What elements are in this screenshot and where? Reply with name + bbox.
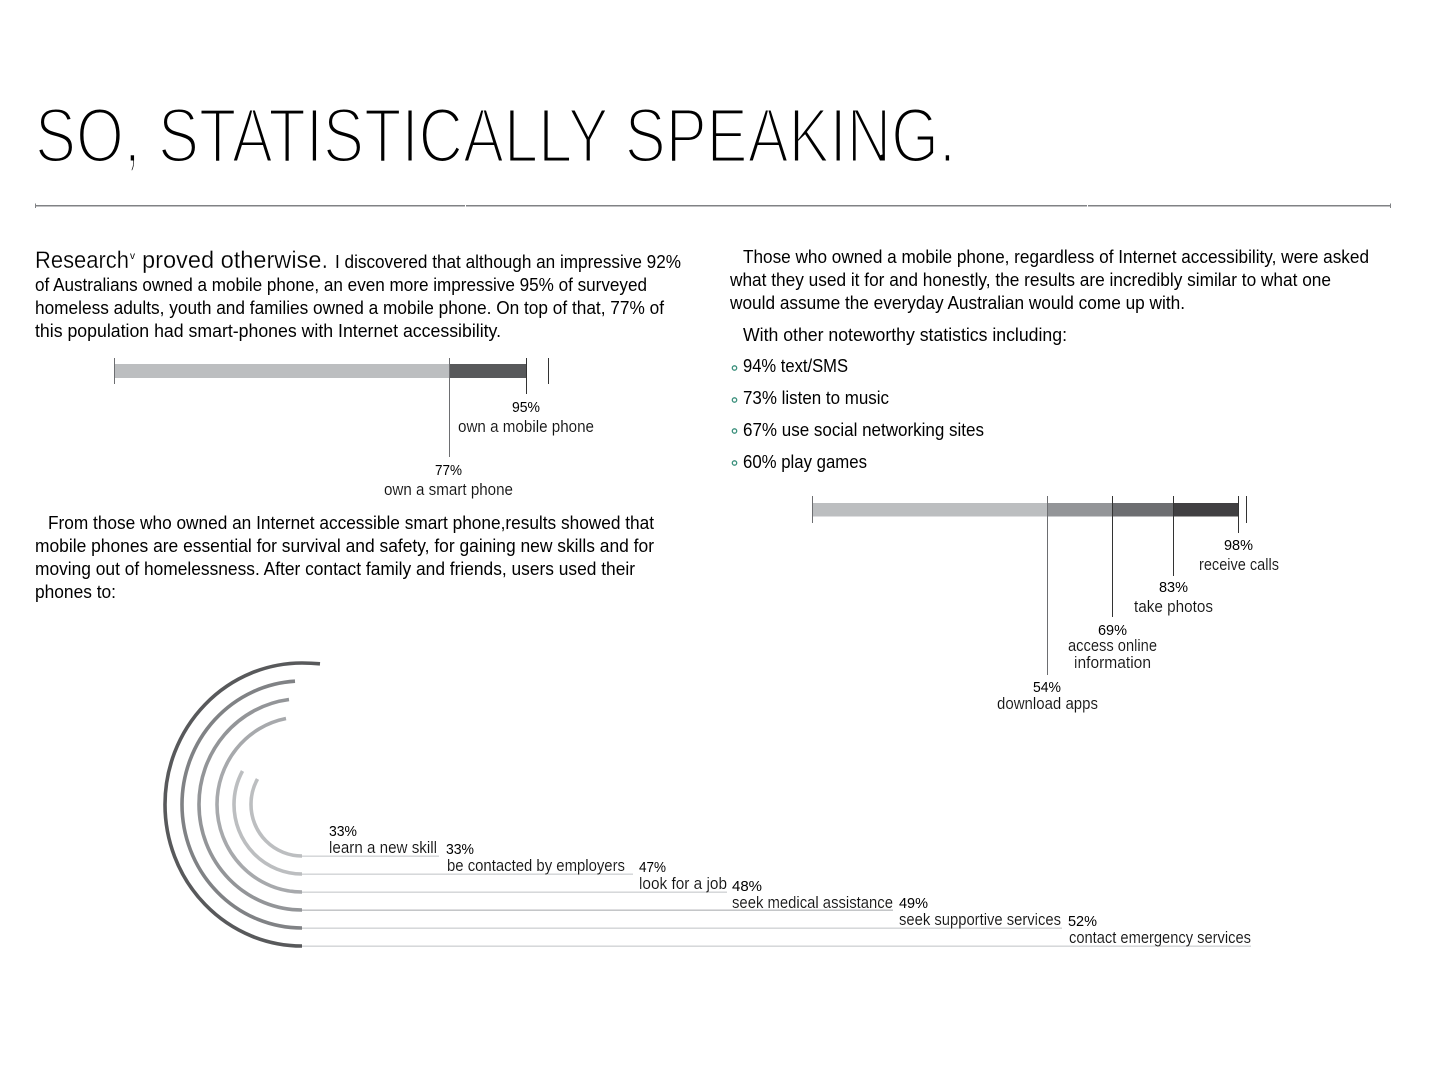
text block: what phones were used for: Those who owned a mobile phone, regardless of Internet accessibility, were asked (743, 247, 1369, 267)
label: 47% look for a job: look for a job (639, 875, 727, 893)
label: 54% download apps (997, 679, 1098, 713)
text block: what phones were used for (729, 247, 1369, 345)
text block: research intro: I discovered that although an impressive 92% (335, 252, 681, 272)
label: 95% own a mobile phone: own a mobile phone (458, 418, 594, 436)
ring: seek supportive services (182, 681, 1062, 928)
label: 54% download apps: download apps (997, 695, 1098, 713)
label: 33% be contacted by employers: 33% (446, 841, 474, 858)
label: 69% access online information: access online (1068, 637, 1157, 655)
label: 47% look for a job: 47% (639, 859, 666, 876)
label: 48% seek medical assistance: seek medical assistance (732, 894, 893, 912)
bullet: play games: 60% play games (743, 452, 867, 472)
text block: what phones were used for: With other noteworthy statistics including: (743, 325, 1067, 345)
label: 52% contact emergency services: contact emergency services (1069, 929, 1251, 947)
bullet list: noteworthy statistics (732, 356, 984, 472)
label: 33% be contacted by employers: be contacted by employers (447, 857, 625, 875)
text block: research intro: proved otherwise. (142, 247, 328, 274)
label: 77% own a smart phone: own a smart phone (384, 481, 513, 499)
label: 83% take photos (1134, 579, 1213, 616)
label: 33% learn a new skill (329, 823, 437, 857)
label: 69% access online information: 69% (1098, 622, 1127, 639)
label: 52% contact emergency services (1068, 913, 1251, 947)
label: 83% take photos: take photos (1134, 598, 1213, 616)
label: 49% seek supportive services (899, 895, 1061, 929)
label: 77% own a smart phone (384, 462, 513, 499)
ring: contact emergency services (165, 663, 1251, 946)
ring: look for a job (217, 718, 727, 892)
label: 49% seek supportive services: seek supportive services (899, 911, 1061, 929)
ring: learn a new skill (251, 779, 439, 856)
text block: smart phone uses intro: mobile phones are essential for survival and safety, for gaining new skills and for (35, 536, 654, 556)
label: 98% receive calls: receive calls (1199, 556, 1279, 574)
text block: smart phone uses intro (35, 513, 654, 602)
label: 98% receive calls (1199, 537, 1279, 574)
label: 77% own a smart phone: 77% (435, 462, 462, 479)
label: 95% own a mobile phone (458, 399, 594, 436)
label: 95% own a mobile phone: 95% (512, 399, 540, 416)
label: 48% seek medical assistance (732, 878, 893, 912)
bullet: use social networking sites: 67% use social networking sites (743, 420, 984, 440)
bullet: listen to music: 73% listen to music (743, 388, 889, 408)
text block: smart phone uses intro: From those who owned an Internet accessible smart phone,results showed that (48, 513, 654, 533)
bar chart: phone ownership (114, 358, 594, 499)
text block: research intro: this population had smart-phones with Internet accessibility. (35, 321, 501, 341)
label: 69% access online information (1068, 622, 1157, 672)
label: 47% look for a job (639, 859, 727, 893)
text block: research intro: v (130, 251, 135, 262)
text block: what phones were used for: would assume the everyday Australian would come up with. (729, 293, 1185, 313)
label: 33% be contacted by employers (446, 841, 625, 875)
label: 83% take photos: 83% (1159, 579, 1188, 596)
title: SO, STATISTICALLY SPEAKING. (35, 93, 956, 179)
label: 49% seek supportive services: 49% (899, 895, 928, 912)
text block: smart phone uses intro: moving out of homelessness. After contact family and friends, users used their (35, 559, 635, 579)
label: 54% download apps: 54% (1033, 679, 1061, 696)
label: 33% learn a new skill: learn a new skill (329, 839, 437, 857)
text block: research intro: homeless adults, youth and families owned a mobile phone. On top of that, 77% of (35, 298, 665, 318)
radial bar chart: phone uses (165, 663, 1251, 947)
ring: be contacted by employers (234, 771, 633, 874)
bar chart: other phone uses (812, 496, 1279, 713)
bullet: text/SMS: 94% text/SMS (743, 356, 848, 376)
text block: research intro: of Australians owned a mobile phone, an even more impressive 95% of surveyed (35, 275, 647, 295)
ring: seek medical assistance (199, 700, 893, 910)
text block: research intro: Research (35, 247, 129, 274)
title rule (35, 204, 1391, 208)
label: 52% contact emergency services: 52% (1068, 913, 1097, 930)
label: 69% access online information: information (1074, 654, 1151, 672)
text block: what phones were used for: what they used it for and honestly, the results are incredibly similar to what one (729, 270, 1331, 290)
label: 33% learn a new skill: 33% (329, 823, 357, 840)
label: 48% seek medical assistance: 48% (732, 878, 762, 895)
label: 98% receive calls: 98% (1224, 537, 1253, 554)
text block: smart phone uses intro: phones to: (35, 582, 116, 602)
text block: research intro (35, 247, 681, 341)
